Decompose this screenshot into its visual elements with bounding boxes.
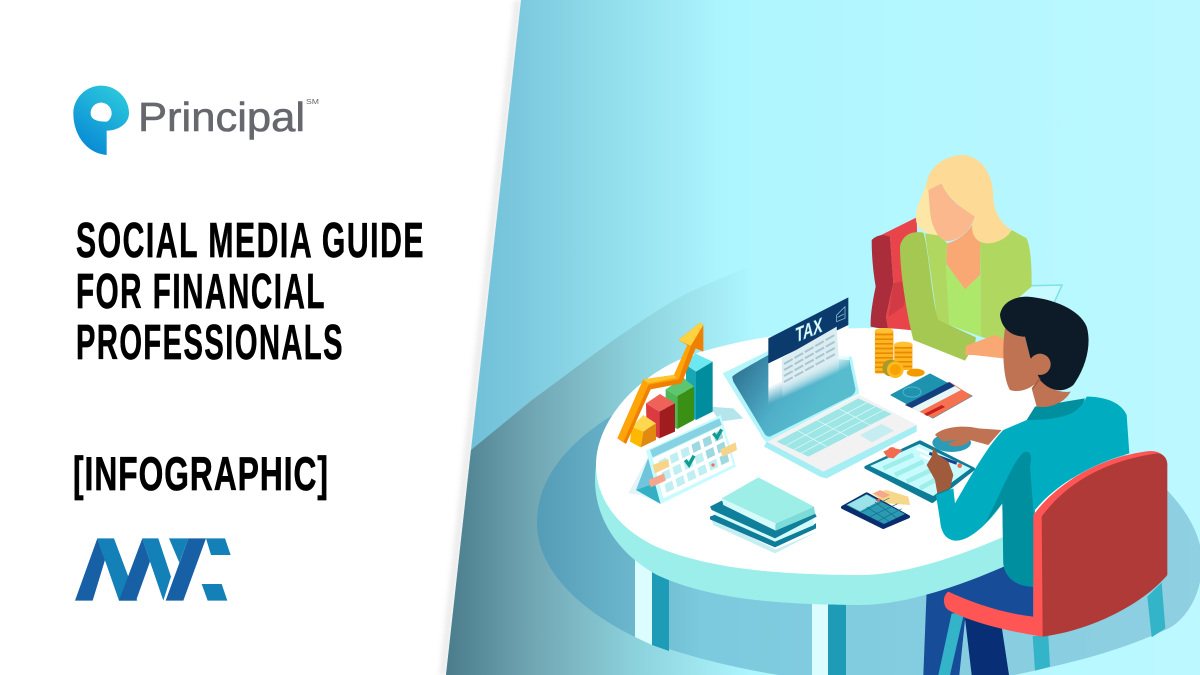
clip xyxy=(883,447,903,458)
icon: Principal pin xyxy=(73,86,129,155)
hand with pen xyxy=(927,447,962,493)
books xyxy=(710,477,817,553)
wordmark: Principal xyxy=(138,94,305,140)
woman's chair xyxy=(871,217,920,337)
torso xyxy=(936,397,1129,587)
service mark: SM xyxy=(306,99,319,106)
panel: illustration background xyxy=(446,0,1200,675)
laptop base xyxy=(764,395,917,478)
arm on mouse xyxy=(935,427,1002,446)
label: infographic: [INFOGRAPHIC] xyxy=(73,447,329,500)
date cells xyxy=(658,430,729,493)
table xyxy=(595,328,1080,605)
man's chair xyxy=(938,451,1167,675)
man's head xyxy=(1000,297,1089,407)
form icon xyxy=(837,307,845,322)
panel edge shadow xyxy=(440,0,521,675)
bar red xyxy=(646,394,675,438)
logo: Principal xyxy=(73,86,319,155)
sticky notes xyxy=(649,442,737,487)
tax label: TAX xyxy=(796,312,823,347)
tax form body xyxy=(768,325,849,423)
woman xyxy=(900,155,1032,361)
bar green xyxy=(666,378,694,429)
collar xyxy=(1027,398,1085,420)
darker lower backdrop xyxy=(446,267,840,675)
chair back xyxy=(1042,453,1167,637)
calculator xyxy=(843,490,910,527)
calendar xyxy=(628,415,737,504)
logo: MTC xyxy=(75,538,231,601)
form sheet xyxy=(782,327,840,412)
title xyxy=(76,214,425,370)
table edge xyxy=(595,340,1080,605)
bar yellow xyxy=(630,415,656,447)
floor shadow xyxy=(537,400,1200,675)
mouse xyxy=(932,433,971,452)
man's pants xyxy=(923,563,1033,675)
check marks xyxy=(685,429,722,465)
form lines xyxy=(883,455,935,488)
shadow xyxy=(710,407,743,422)
title: SOCIAL MEDIA GUIDE xyxy=(76,214,425,268)
credit card xyxy=(891,374,972,418)
coins xyxy=(875,328,925,378)
tablet held by woman xyxy=(991,285,1062,360)
man xyxy=(927,397,1129,587)
table top xyxy=(596,328,1080,575)
chair legs xyxy=(938,583,1165,675)
tax form header xyxy=(768,297,848,363)
title: PROFESSIONALS xyxy=(76,316,344,370)
bar chart with arrow xyxy=(617,323,743,447)
title: FOR FINANCIAL xyxy=(76,265,326,319)
laptop with tax form xyxy=(723,297,917,478)
clipboard xyxy=(866,442,973,501)
bar teal xyxy=(686,353,713,420)
laptop screen xyxy=(723,350,859,442)
arm shade xyxy=(985,452,1033,587)
table leg middle xyxy=(812,590,846,675)
chair frame xyxy=(944,451,1167,637)
table leg left xyxy=(635,530,669,651)
arrow xyxy=(617,323,703,444)
